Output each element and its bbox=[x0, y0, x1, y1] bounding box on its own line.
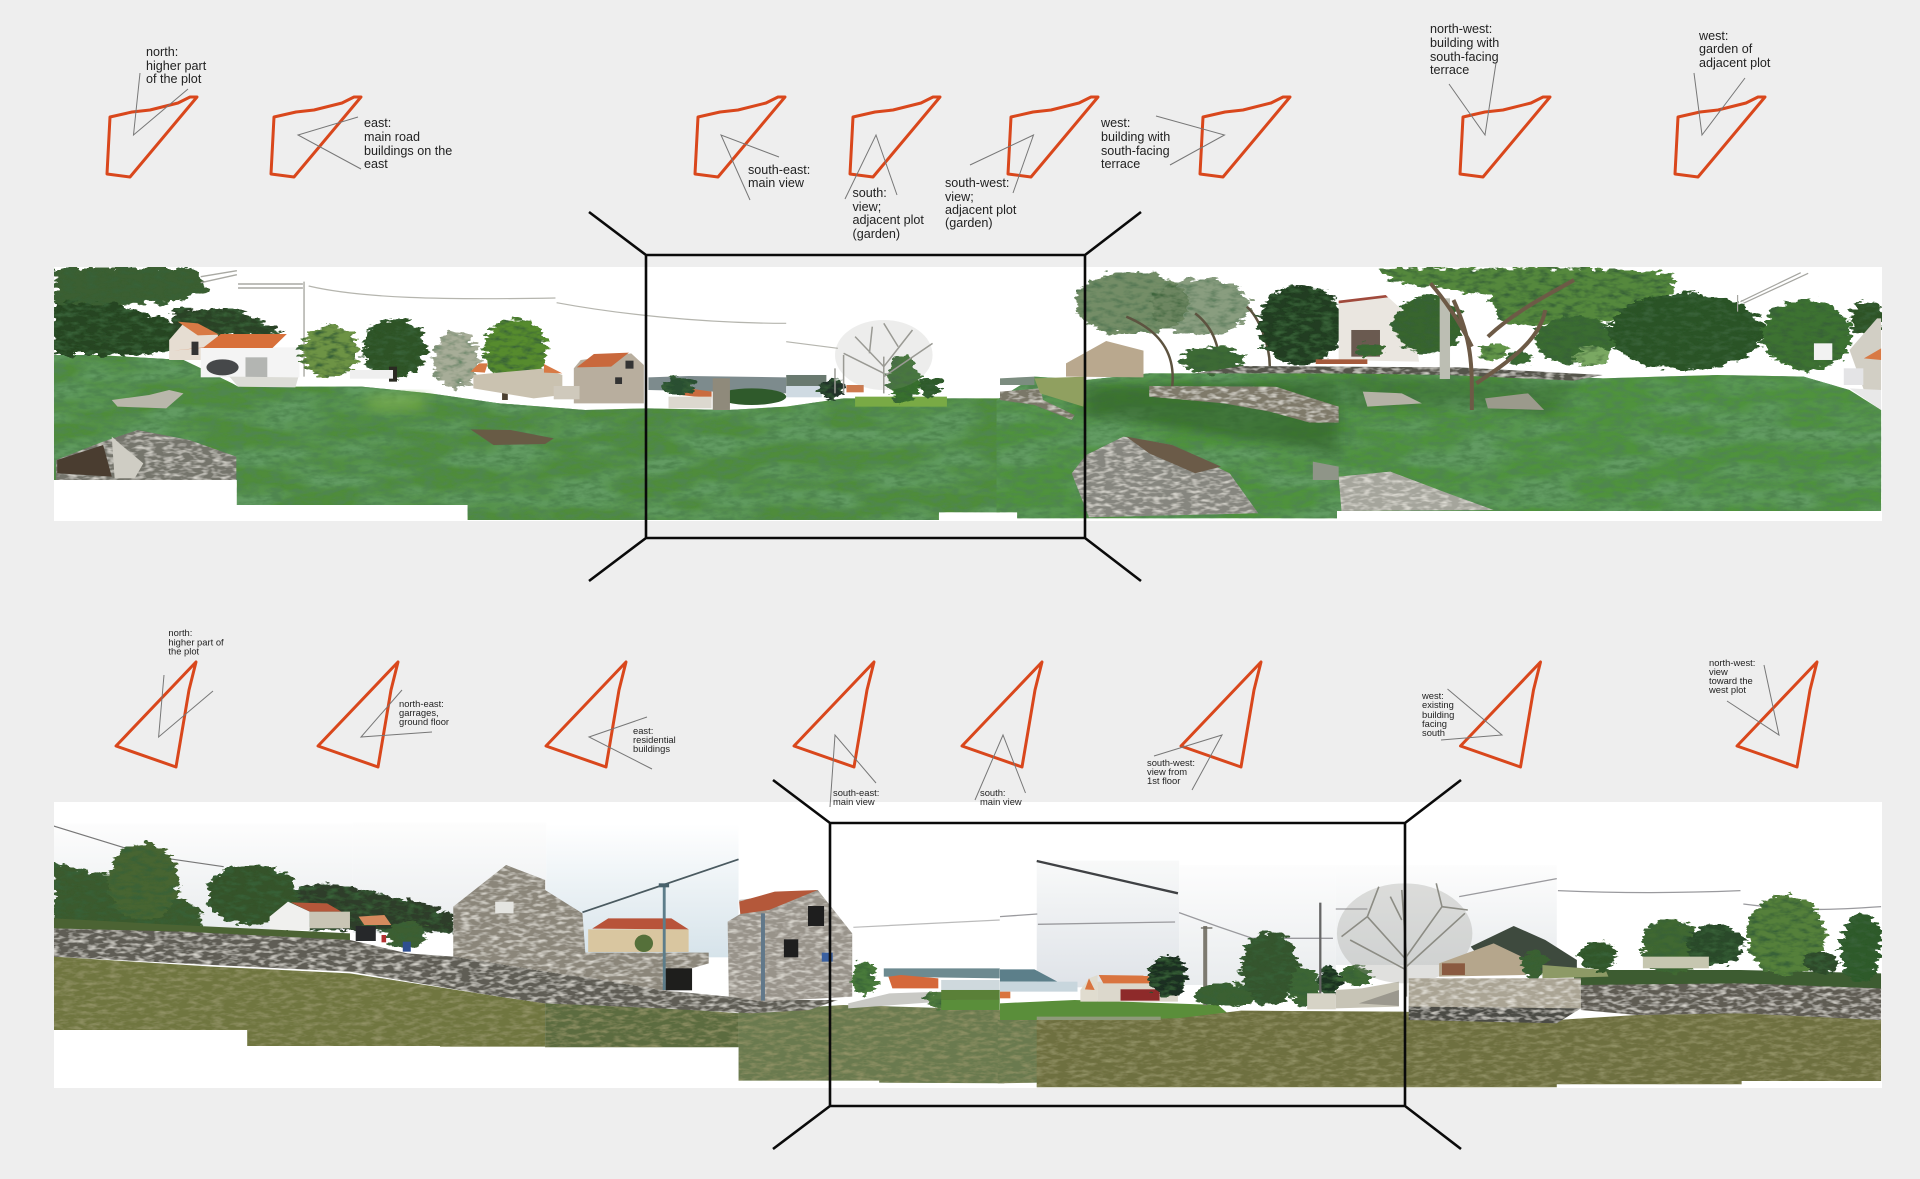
key lower: west existing building: west: bbox=[1421, 690, 1444, 701]
hedge above wall bbox=[54, 918, 350, 942]
key: north-west building with terrace: north-west: bbox=[1430, 22, 1492, 36]
tree canopy top-left bbox=[54, 268, 209, 320]
key lower: north-west toward the west plot: view bbox=[1709, 666, 1728, 677]
key lower: north-east garages: north-east: bbox=[399, 698, 444, 709]
key: north-west building with terrace: terrace bbox=[1430, 63, 1469, 77]
light tree canopies bbox=[1075, 272, 1189, 335]
key lower: north higher part: higher part of bbox=[168, 636, 224, 648]
vegetation ground right bbox=[997, 372, 1881, 518]
key lower: south main view bbox=[962, 662, 1042, 807]
lawn bbox=[1000, 1000, 1230, 1022]
key: west building with terrace: building with bbox=[1101, 130, 1170, 144]
key lower: south-west view from first floor: 1st floor bbox=[1147, 775, 1180, 786]
roadside trees bbox=[301, 325, 359, 378]
stone houses bbox=[473, 368, 562, 398]
key lower: north higher part: north: bbox=[168, 627, 192, 638]
key: south adjacent plot bbox=[845, 97, 940, 241]
key: north higher part bbox=[107, 45, 207, 177]
white house bbox=[270, 902, 310, 930]
tower and roofs bbox=[713, 378, 730, 410]
key lower: west existing building bbox=[1421, 662, 1540, 767]
low white wall and path bbox=[1307, 993, 1336, 1009]
key lower: north-west toward the west plot: toward the bbox=[1709, 675, 1753, 686]
stone walls bbox=[1409, 978, 1581, 1008]
wall stones bbox=[1149, 386, 1339, 423]
wire bbox=[54, 826, 224, 867]
key: north-west building with terrace bbox=[1430, 22, 1550, 177]
key lower: east residential buildings: buildings bbox=[633, 743, 670, 754]
key lower: north-west toward the west plot: west plot bbox=[1708, 684, 1746, 695]
key lower: west existing building: building bbox=[1422, 709, 1454, 720]
second stone house bbox=[728, 890, 852, 1002]
trees and lamp bbox=[1195, 983, 1258, 1007]
key: east main road: buildings on the bbox=[364, 144, 452, 158]
key: north-west building with terrace: building with bbox=[1430, 36, 1499, 50]
key: north higher part: of the plot bbox=[146, 72, 202, 86]
key lower: south-east main view bbox=[794, 662, 879, 807]
key: west building with terrace: south-facing bbox=[1101, 144, 1170, 158]
grass bbox=[54, 957, 545, 1047]
right-hand trees bbox=[1608, 293, 1763, 370]
key lower: west existing building: facing bbox=[1422, 718, 1447, 729]
key: north higher part: north: bbox=[146, 45, 178, 59]
sky patches bbox=[54, 856, 352, 930]
key: east main road: east bbox=[364, 157, 388, 171]
key lower: north-east garages bbox=[318, 662, 449, 767]
key lower: east residential buildings: east: bbox=[633, 725, 653, 736]
key: west garden of adjacent plot bbox=[1675, 29, 1771, 177]
key: south adjacent plot: view; bbox=[852, 200, 881, 214]
key: south-west adjacent plot: (garden) bbox=[945, 216, 993, 230]
key: south-west adjacent plot bbox=[945, 97, 1098, 230]
rock outcrop bbox=[56, 430, 236, 480]
key: west building with terrace bbox=[1100, 97, 1290, 177]
key lower: north-east garages: ground floor bbox=[399, 716, 449, 727]
tree group and far villa bbox=[1642, 919, 1701, 974]
key: south-east main view: south-east: bbox=[748, 163, 810, 177]
key lower: north-west toward the west plot: north-west: bbox=[1709, 657, 1755, 668]
left sea and hill bbox=[1000, 969, 1057, 982]
key: south-west adjacent plot: south-west: bbox=[945, 176, 1009, 190]
white house bbox=[169, 323, 218, 360]
trees and hill bbox=[287, 883, 453, 933]
key: west building with terrace: terrace bbox=[1101, 157, 1140, 171]
key: south-east main view: main view bbox=[748, 176, 805, 190]
key: north-west building with terrace: south-facing bbox=[1430, 50, 1499, 64]
rubble slope bbox=[1072, 437, 1258, 517]
pole bbox=[1203, 926, 1207, 1005]
key lower: east residential buildings: residential bbox=[633, 734, 676, 745]
key: west building with terrace: west: bbox=[1100, 116, 1130, 130]
stone house with AC unit bbox=[453, 865, 709, 990]
stone terrace wall bbox=[1195, 366, 1603, 381]
key: south-west adjacent plot: view; bbox=[945, 190, 974, 204]
key lower: north higher part: the plot bbox=[168, 646, 200, 656]
key: north higher part: higher part bbox=[146, 59, 207, 73]
key: south adjacent plot: south: bbox=[852, 186, 887, 200]
key lower: south-east main view: south-east: bbox=[833, 787, 879, 798]
dark cypress bbox=[1258, 285, 1344, 365]
key lower: north-west toward the west plot bbox=[1708, 657, 1817, 767]
key lower: north higher part bbox=[116, 627, 224, 767]
key: south-west adjacent plot: adjacent plot bbox=[945, 203, 1017, 217]
white house with orange roof bbox=[1080, 975, 1098, 1002]
stone house behind trees bbox=[1066, 341, 1144, 377]
key: east main road bbox=[271, 97, 452, 177]
key lower: west existing building: existing bbox=[1422, 699, 1454, 710]
panorama: upper site photo collage bbox=[54, 267, 1884, 521]
key lower: east residential buildings bbox=[546, 662, 676, 769]
key lower: west existing building: south bbox=[1422, 727, 1445, 738]
key: west garden of adjacent plot: west: bbox=[1698, 29, 1728, 43]
key lower: south main view: main view bbox=[980, 796, 1022, 807]
hedge bbox=[1574, 970, 1881, 990]
key lower: south-west view from first floor: view from bbox=[1147, 766, 1187, 777]
concrete pole bbox=[1440, 298, 1450, 379]
dry-stone wall bbox=[54, 928, 838, 1013]
distant hills and sea bbox=[648, 376, 786, 393]
key lower: south-east main view: main view bbox=[833, 796, 875, 807]
mountain and tan house bbox=[1471, 926, 1577, 973]
key lower: north-east garages: garrages, bbox=[399, 707, 439, 718]
wires bbox=[1037, 861, 1178, 893]
stone wall at far left bbox=[1000, 388, 1075, 420]
key: south adjacent plot: (garden) bbox=[852, 227, 900, 241]
white villa bbox=[1339, 295, 1419, 362]
bare tree bbox=[1337, 883, 1472, 997]
key lower: south main view: south: bbox=[980, 787, 1006, 798]
panorama: lower site photo collage bbox=[54, 802, 1882, 1088]
key: east main road: east: bbox=[364, 116, 391, 130]
central tree trunk bbox=[1430, 280, 1574, 410]
key: south adjacent plot: adjacent plot bbox=[852, 213, 924, 227]
utility pole and wires bbox=[201, 271, 304, 377]
frame: upper main view bbox=[589, 212, 1141, 581]
key lower: south-west view from first floor: south-west: bbox=[1147, 757, 1195, 768]
key: west garden of adjacent plot: garden of bbox=[1699, 42, 1753, 56]
wire and lamp post bbox=[582, 859, 739, 912]
corner house, sign and van bbox=[1850, 318, 1881, 390]
key lower: south-west view from first floor bbox=[1147, 662, 1261, 790]
frame: lower main view bbox=[773, 780, 1461, 1149]
central tree canopy bbox=[1379, 268, 1673, 327]
key: west garden of adjacent plot: adjacent plot bbox=[1699, 56, 1771, 70]
peach building bbox=[588, 929, 689, 952]
grass bbox=[1037, 1011, 1881, 1087]
vegetation ground left bbox=[54, 355, 1000, 520]
key: south-east main view bbox=[695, 97, 810, 200]
key: east main road: main road bbox=[364, 130, 420, 144]
wire, far hills and village bbox=[853, 920, 1000, 927]
field strip and far trees bbox=[855, 397, 947, 407]
sky patches bbox=[1037, 861, 1179, 987]
